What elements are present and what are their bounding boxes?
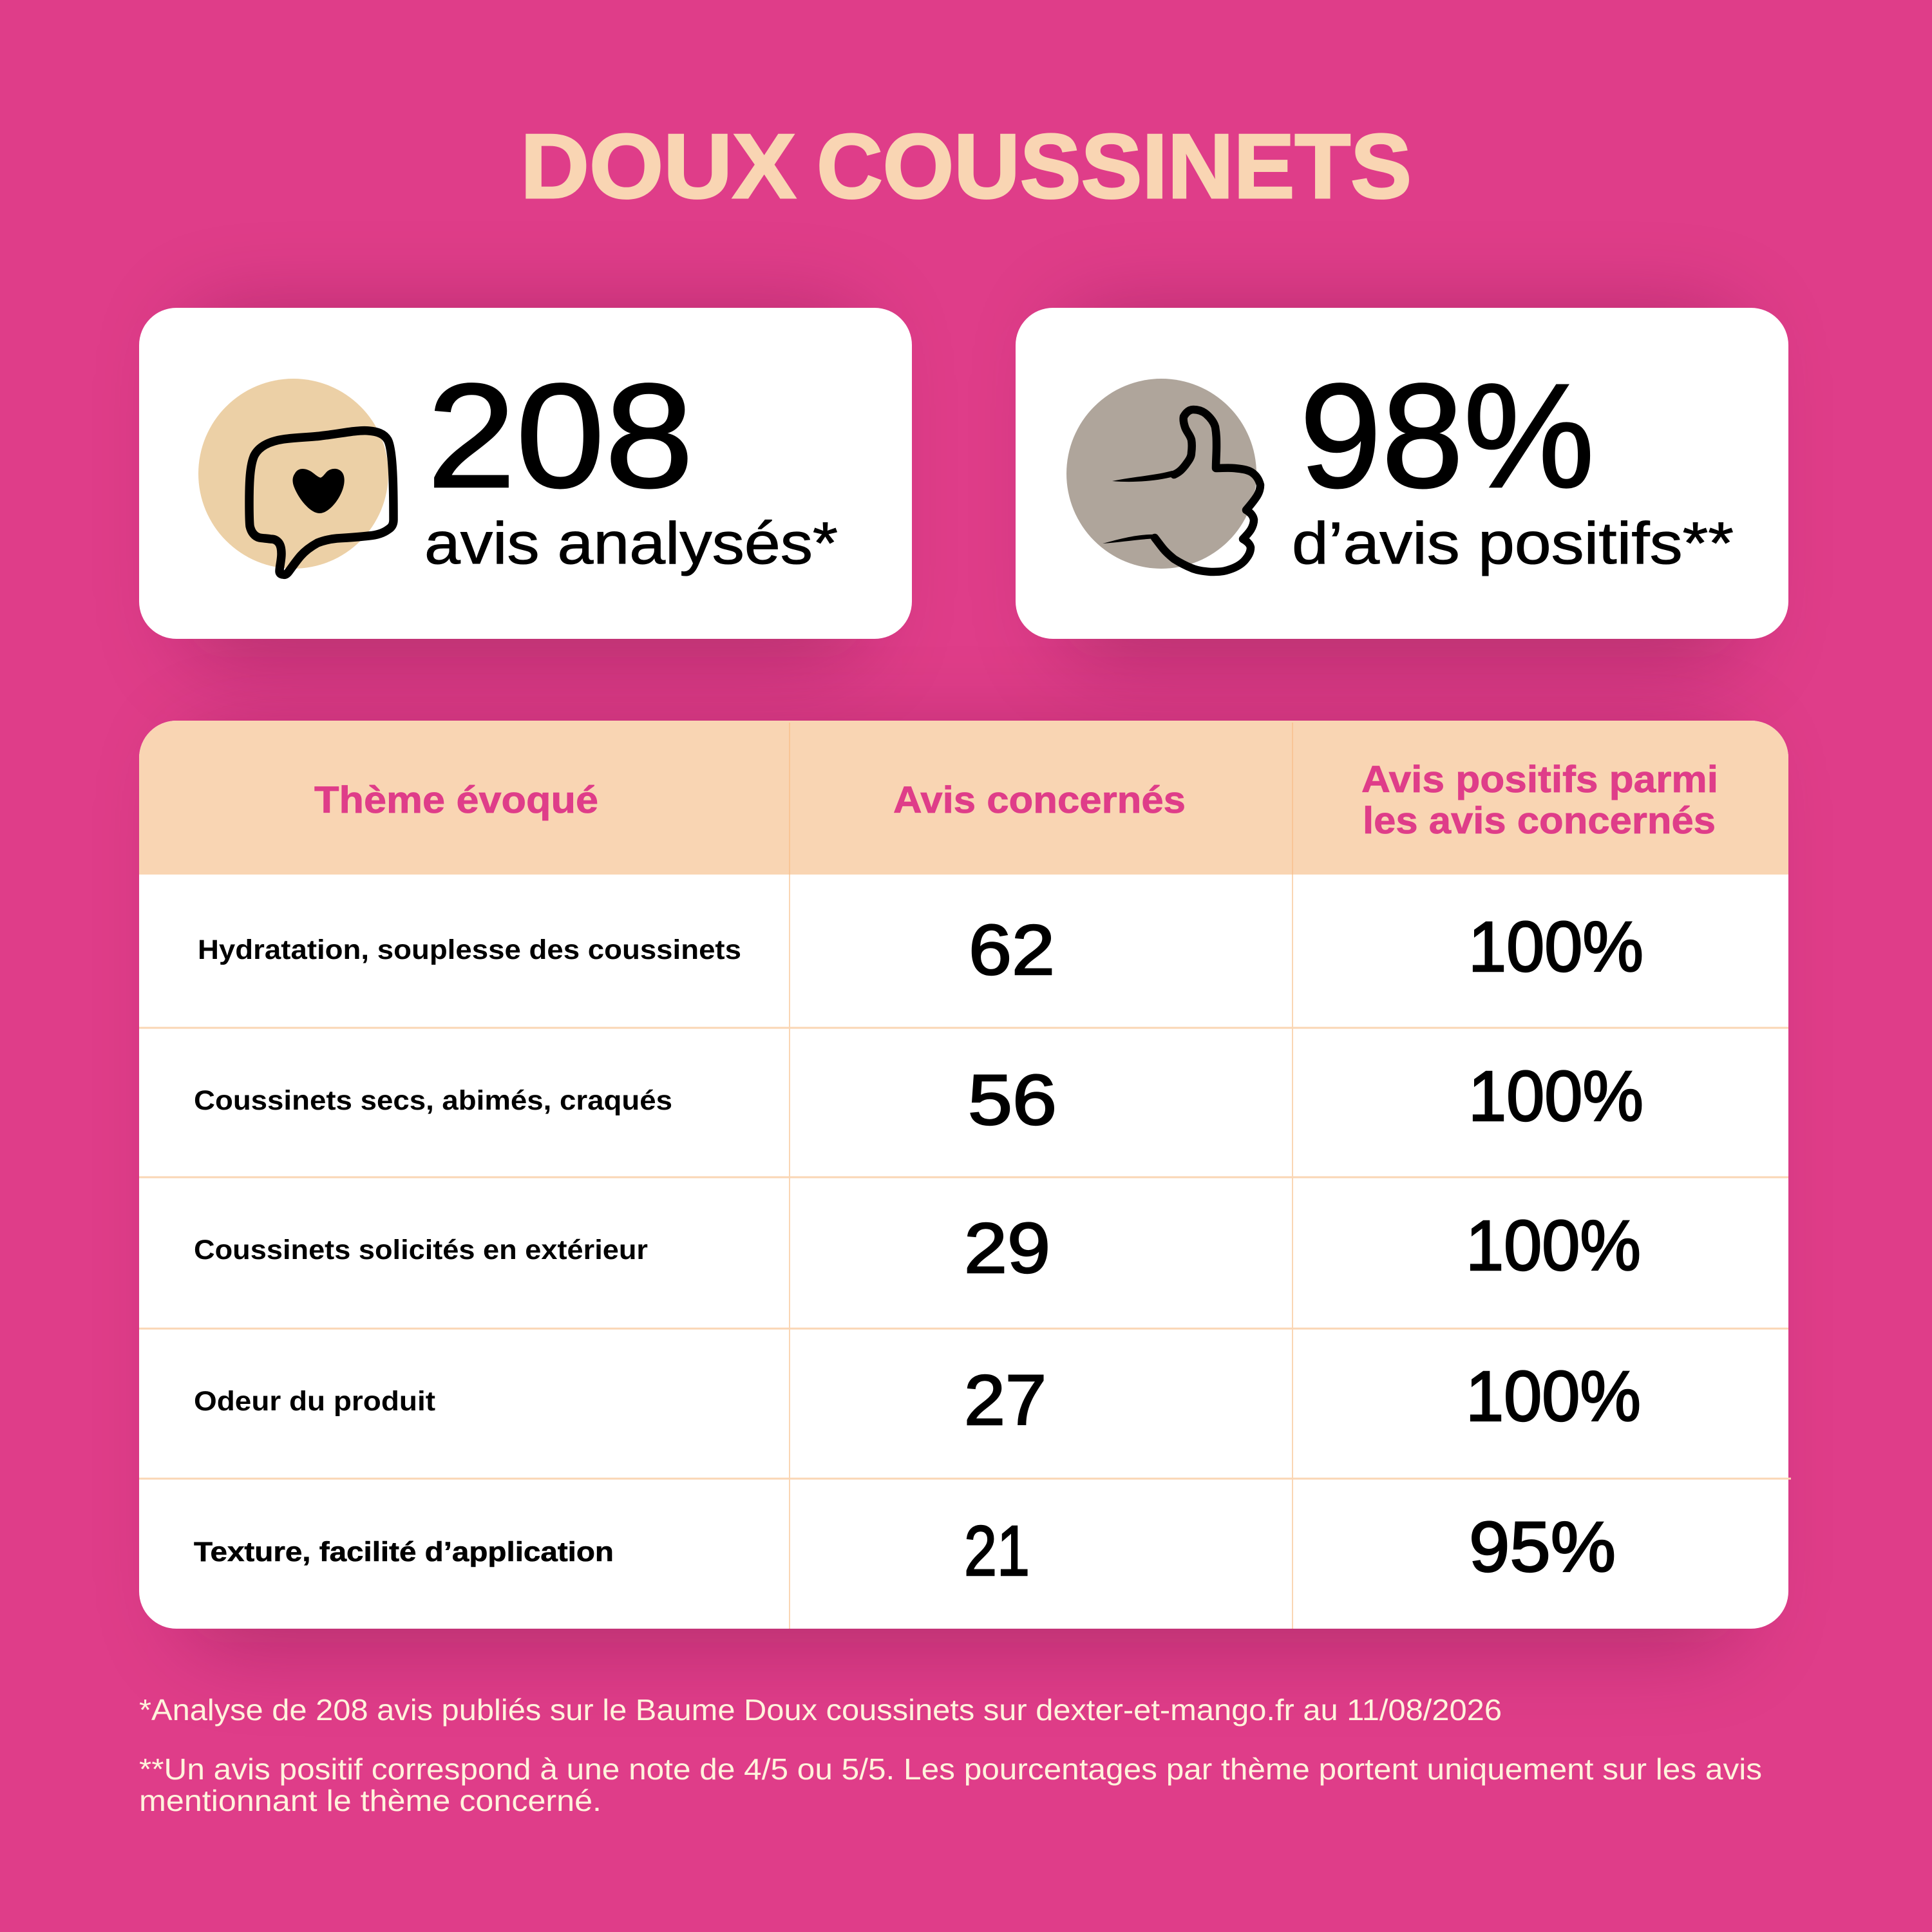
header: avis positifs: Avis positifs parmi xyxy=(1361,759,1718,800)
row: texture: 95% xyxy=(1469,1508,1616,1587)
row: coussinets secs: Coussinets secs, abimés, craqués xyxy=(194,1085,672,1116)
table header xyxy=(139,721,1788,875)
header: avis positifs xyxy=(1361,759,1718,842)
row: hydratation: 100% xyxy=(1468,907,1643,987)
footnotes: **Un avis positif correspond à une note de 4/5 ou 5/5. Les pourcentages par thème portent uniquement sur les avis xyxy=(139,1752,1762,1786)
row: odeur: 100% xyxy=(1466,1357,1641,1436)
title xyxy=(520,115,1412,218)
row: hydratation xyxy=(198,907,1643,990)
stat: 98%: 98% xyxy=(1300,353,1595,518)
stat: 208: 208 xyxy=(427,353,694,518)
row: hydratation: Hydratation, souplesse des coussinets xyxy=(198,934,741,965)
title: DOUX xyxy=(520,115,796,218)
panel: positive reviews xyxy=(1016,308,1788,639)
row: odeur xyxy=(194,1357,1641,1440)
header: avis positifs: les avis concernés xyxy=(1363,800,1716,842)
row: extérieur: 100% xyxy=(1466,1206,1641,1285)
label: avis analysés: avis analysés* xyxy=(424,511,838,576)
row: coussinets secs: 56 xyxy=(968,1061,1057,1140)
icon: thumbs up xyxy=(1066,379,1260,572)
row: extérieur: Coussinets solicités en extérieur xyxy=(194,1235,648,1265)
row: texture xyxy=(194,1508,1616,1591)
header: avis concernés: Avis concernés xyxy=(893,779,1186,821)
row: odeur: Odeur du produit xyxy=(194,1386,435,1417)
icon: speech bubble with heart xyxy=(198,379,393,574)
row: coussinets secs: 100% xyxy=(1468,1057,1643,1136)
row: texture: Texture, facilité d’application xyxy=(194,1537,614,1567)
panel: table xyxy=(139,721,1791,1629)
footnotes: *Analyse de 208 avis publiés sur le Baume Doux coussinets sur dexter-et-mango.fr au 11/08/2026 xyxy=(139,1693,1502,1727)
footnotes: mentionnant le thème concerné. xyxy=(139,1784,601,1817)
title: COUSSINETS xyxy=(817,115,1412,218)
row: extérieur: 29 xyxy=(964,1209,1050,1288)
row: odeur: 27 xyxy=(964,1361,1046,1440)
label: avis positifs: d’avis positifs** xyxy=(1292,511,1734,576)
header: thème: Thème évoqué xyxy=(314,779,598,821)
row: coussinets secs xyxy=(194,1057,1643,1140)
footnotes xyxy=(139,1693,1762,1817)
panel: reviews analysed xyxy=(139,308,912,639)
row: extérieur xyxy=(194,1206,1641,1288)
row: texture: 21 xyxy=(964,1511,1030,1591)
row: hydratation: 62 xyxy=(969,911,1055,990)
